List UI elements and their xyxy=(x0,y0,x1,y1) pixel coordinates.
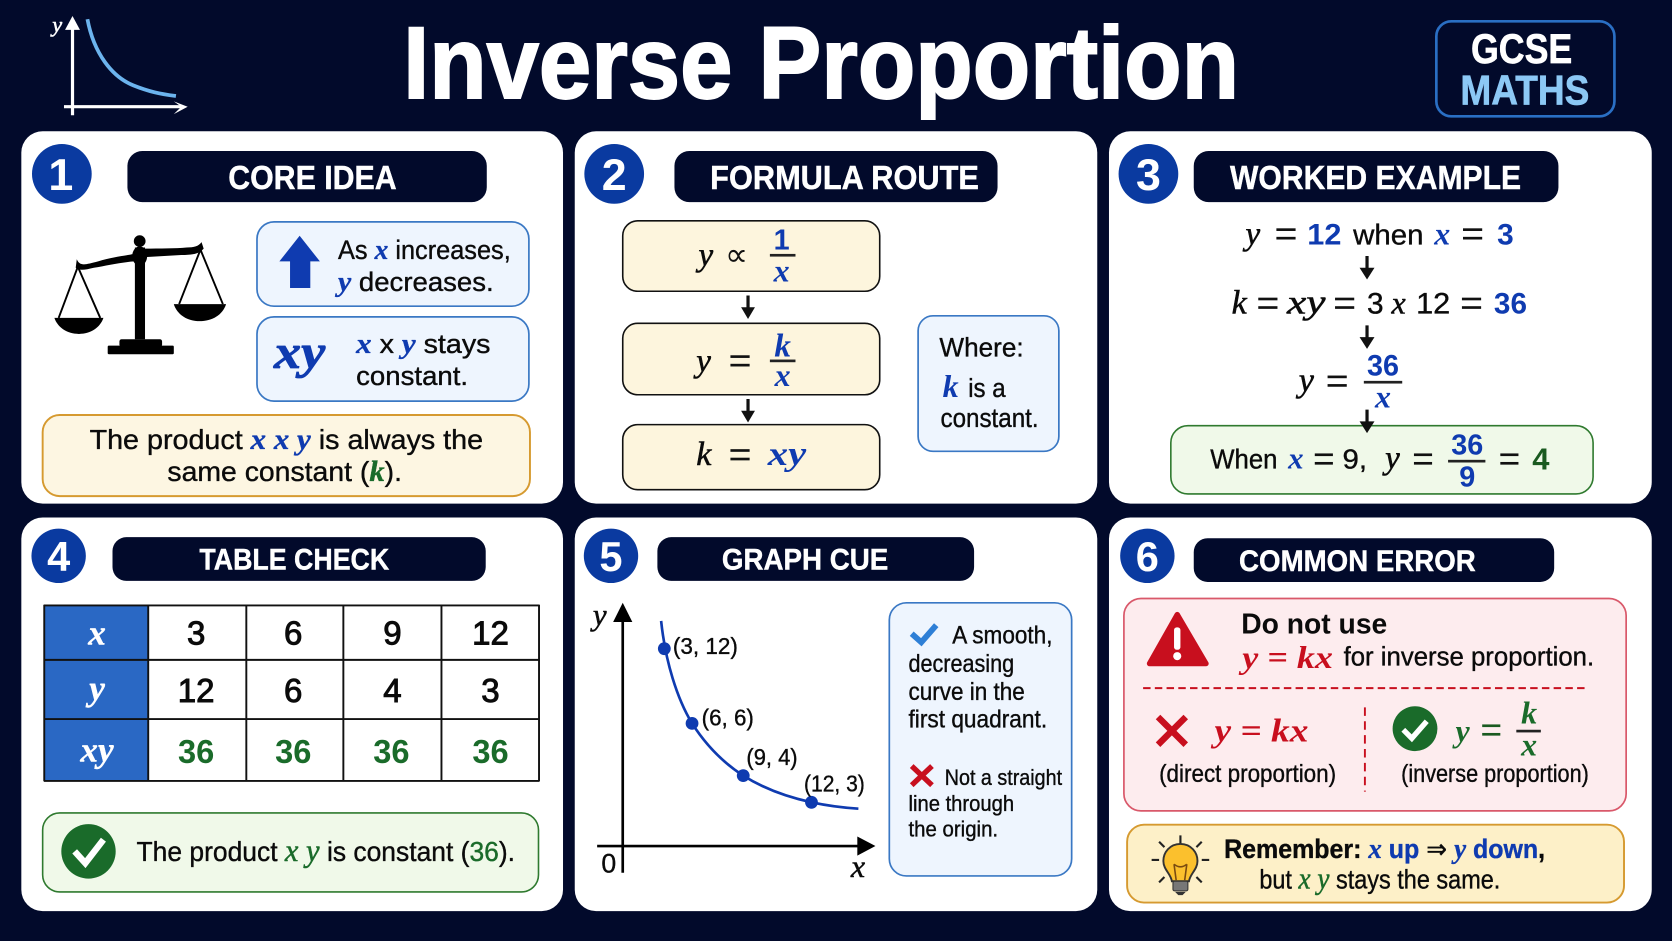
heading: common error xyxy=(1194,538,1554,582)
result box: when x = 9, y = 4: 36 xyxy=(1451,429,1483,461)
icon: header inverse curve graph xyxy=(50,12,188,115)
callout: xy stays constant: xy xyxy=(273,326,326,379)
icon: up arrow xyxy=(279,236,320,288)
formula: y proportional to 1 over x: y xyxy=(695,238,713,274)
number badge 4 xyxy=(31,529,86,583)
chart: inverse curve: 0 xyxy=(601,849,616,879)
table: x, y and xy values: 12 xyxy=(178,673,215,710)
result box: when x = 9, y = 4: y xyxy=(1382,440,1400,476)
number badge 3 xyxy=(1119,144,1178,204)
formula: k equals xy: k xyxy=(696,436,712,473)
step: k = xy = 3 x 12 = 36: 36 xyxy=(1494,288,1527,321)
badge: GCSE Maths xyxy=(1436,21,1614,116)
warning box: (direct proportion) xyxy=(1159,761,1336,788)
result box: when x = 9, y = 4: 9 xyxy=(1459,461,1475,494)
icon: header inverse curve graph: y xyxy=(50,12,62,37)
chart: inverse curve: x xyxy=(850,848,865,884)
heading: graph cue: GRAPH CUE xyxy=(722,544,888,577)
callout: as x increases: As x increases, xyxy=(338,234,511,266)
chart: inverse curve: (9, 4) xyxy=(746,744,798,770)
callout: curve description: line through xyxy=(909,791,1014,816)
callout: curve description: curve in the xyxy=(909,679,1025,706)
callout: where k is a constant: is a xyxy=(968,375,1006,403)
icon: blue check xyxy=(912,625,936,642)
table: x, y and xy values: 6 xyxy=(284,673,302,710)
badge: GCSE Maths: MATHS xyxy=(1460,67,1589,114)
callout: curve description: decreasing xyxy=(909,651,1014,678)
callout: remember: Remember: x up ⇒ y down, xyxy=(1224,833,1545,865)
number badge 2 xyxy=(584,144,644,204)
table: x, y and xy values: 9 xyxy=(383,615,402,652)
result box: when x = 9, y = 4: 4 xyxy=(1532,441,1550,476)
arrow down xyxy=(741,399,755,422)
table: x, y and xy values: 6 xyxy=(284,615,302,652)
heading: core idea xyxy=(127,151,487,202)
heading: table check xyxy=(112,537,486,581)
warning box: (inverse proportion) xyxy=(1401,761,1589,788)
table: x, y and xy values: y xyxy=(85,669,105,708)
heading: worked example: WORKED EXAMPLE xyxy=(1230,160,1521,197)
warning box: for inverse proportion. xyxy=(1344,642,1594,672)
step: k = xy = 3 x 12 = 36: 12 xyxy=(1416,288,1450,321)
formula: y proportional to 1 over x: ∝ xyxy=(725,236,748,274)
formula: y proportional to 1 over x xyxy=(623,221,880,291)
formula: y equals k over x: k xyxy=(774,328,791,364)
table: x, y and xy values: 36 xyxy=(472,734,509,771)
callout: as x increases: y decreases. xyxy=(335,266,494,298)
step: y = 36 over x: y xyxy=(1296,363,1315,400)
heading: core idea: CORE IDEA xyxy=(228,160,397,197)
table: x, y and xy values: 36 xyxy=(275,734,311,771)
callout: product is constant xyxy=(43,415,530,496)
number badge 6 xyxy=(1120,529,1175,583)
result box: when x = 9, y = 4: When xyxy=(1210,443,1277,474)
callout: xy stays constant xyxy=(257,317,529,401)
callout: where k is a constant: k xyxy=(943,368,959,404)
formula: y equals k over x xyxy=(623,323,880,395)
chart: inverse curve xyxy=(590,597,875,884)
callout: curve description: A smooth, xyxy=(952,622,1052,649)
badge: GCSE Maths: GCSE xyxy=(1471,25,1572,72)
callout: product is constant: The product x x y is always the xyxy=(90,423,483,456)
callout: xy stays constant: constant. xyxy=(356,361,468,391)
table: x, y and xy values xyxy=(44,605,540,781)
callout: remember xyxy=(1127,825,1624,903)
arrow down xyxy=(1360,256,1374,280)
step: y = 12 when x = 3: 12 xyxy=(1307,218,1341,251)
step: y = 12 when x = 3: x xyxy=(1433,215,1450,251)
formula: k equals xy xyxy=(623,425,880,490)
table: x, y and xy values: x xyxy=(87,613,106,652)
heading: formula route xyxy=(674,151,998,202)
result box: when x = 9, y = 4: x xyxy=(1287,440,1304,475)
warning box: k xyxy=(1521,694,1537,730)
callout: where k is a constant: constant. xyxy=(940,403,1039,433)
number badge 3: 3 xyxy=(1136,150,1161,200)
heading: graph cue xyxy=(657,537,974,581)
callout: curve description xyxy=(889,603,1072,876)
icon: light bulb xyxy=(1152,835,1209,895)
icon: red cross xyxy=(1158,717,1186,745)
arrow down xyxy=(1360,325,1374,349)
callout: remember: but x y stays the same. xyxy=(1259,861,1500,896)
step: k = xy = 3 x 12 = 36: k xyxy=(1232,285,1248,322)
icon: green check xyxy=(61,824,116,879)
formula: k equals xy: xy xyxy=(767,436,807,473)
result box: when x = 9, y = 4: 9, xyxy=(1343,443,1367,474)
warning box: x xyxy=(1520,726,1537,762)
step: k = xy = 3 x 12 = 36: xy xyxy=(1286,285,1327,322)
callout: product is constant: same constant (k). xyxy=(167,455,402,488)
number badge 6: 6 xyxy=(1136,533,1159,580)
table: x, y and xy values: 3 xyxy=(481,673,500,710)
formula: y equals k over x: y xyxy=(693,343,711,379)
warning box: y = kx xyxy=(1238,639,1333,675)
warning box: y = kx xyxy=(1210,713,1308,749)
number badge 5: 5 xyxy=(599,533,623,580)
warning box: y xyxy=(1452,712,1471,748)
icon: green check xyxy=(1393,706,1437,751)
formula: y equals k over x: x xyxy=(774,357,791,393)
number badge 2: 2 xyxy=(602,150,627,200)
number badge 1: 1 xyxy=(48,150,73,200)
chart: inverse curve: y xyxy=(590,597,607,632)
arrow down xyxy=(741,296,755,319)
step: k = xy = 3 x 12 = 36: x xyxy=(1391,285,1406,321)
heading: worked example xyxy=(1194,151,1558,202)
formula: y proportional to 1 over x: 1 xyxy=(774,225,790,257)
table: x, y and xy values: xy xyxy=(79,731,114,770)
heading: formula route: FORMULA ROUTE xyxy=(710,160,979,197)
table: x, y and xy values: 36 xyxy=(178,734,214,771)
icon: red cross xyxy=(912,766,932,785)
title: Inverse Proportion xyxy=(403,5,1239,120)
heading: common error: COMMON ERROR xyxy=(1239,545,1476,578)
callout: curve description: first quadrant. xyxy=(909,707,1047,734)
number badge 4: 4 xyxy=(47,533,70,580)
chart: inverse curve: (6, 6) xyxy=(702,704,754,730)
icon: balance scale xyxy=(54,235,226,354)
panel: table check xyxy=(21,517,563,911)
callout: xy stays constant: x x y stays xyxy=(355,328,491,360)
chart: inverse curve: (3, 12) xyxy=(673,633,738,659)
step: k = xy = 3 x 12 = 36: 3 xyxy=(1367,288,1384,321)
chart: inverse curve: (12, 3) xyxy=(804,771,865,797)
arrow down xyxy=(1360,410,1374,433)
panel: formula route xyxy=(575,131,1097,504)
panel: common error xyxy=(1109,517,1652,911)
result box: when x = 9, y = 4 xyxy=(1171,426,1593,494)
step: y = 12 when x = 3: 3 xyxy=(1497,218,1514,251)
step: y = 36 over x: 36 xyxy=(1367,350,1399,383)
callout: curve description: the origin. xyxy=(909,816,998,841)
step: y = 12 when x = 3 xyxy=(1242,215,1514,252)
step: k = xy = 3 x 12 = 36 xyxy=(1232,285,1527,322)
step: y = 36 over x xyxy=(1296,350,1402,415)
panel: core idea xyxy=(21,131,563,504)
callout: product xy is constant: The product x y is constant (36). xyxy=(136,832,515,868)
step: y = 12 when x = 3: y xyxy=(1242,216,1260,252)
step: y = 12 when x = 3: when xyxy=(1352,219,1424,251)
number badge 5 xyxy=(584,529,638,583)
callout: where k is a constant xyxy=(918,316,1059,451)
table: x, y and xy values: 12 xyxy=(472,615,509,652)
warning box xyxy=(1124,599,1626,811)
callout: as x increases xyxy=(257,222,529,306)
panel: worked example xyxy=(1109,131,1652,504)
table: x, y and xy values: 36 xyxy=(373,734,409,771)
callout: product xy is constant xyxy=(43,813,538,892)
callout: curve description: Not a straight xyxy=(945,765,1063,790)
panel: graph cue xyxy=(575,517,1097,911)
step: y = 36 over x: x xyxy=(1374,379,1391,415)
warning box: Do not use xyxy=(1241,609,1387,641)
icon: warning triangle xyxy=(1150,615,1206,664)
heading: table check: TABLE CHECK xyxy=(199,544,390,577)
number badge 1 xyxy=(32,144,92,204)
formula: y proportional to 1 over x: x xyxy=(773,253,790,289)
callout: where k is a constant: Where: xyxy=(939,332,1024,362)
table: x, y and xy values: 4 xyxy=(383,673,402,710)
table: x, y and xy values: 3 xyxy=(187,615,205,652)
